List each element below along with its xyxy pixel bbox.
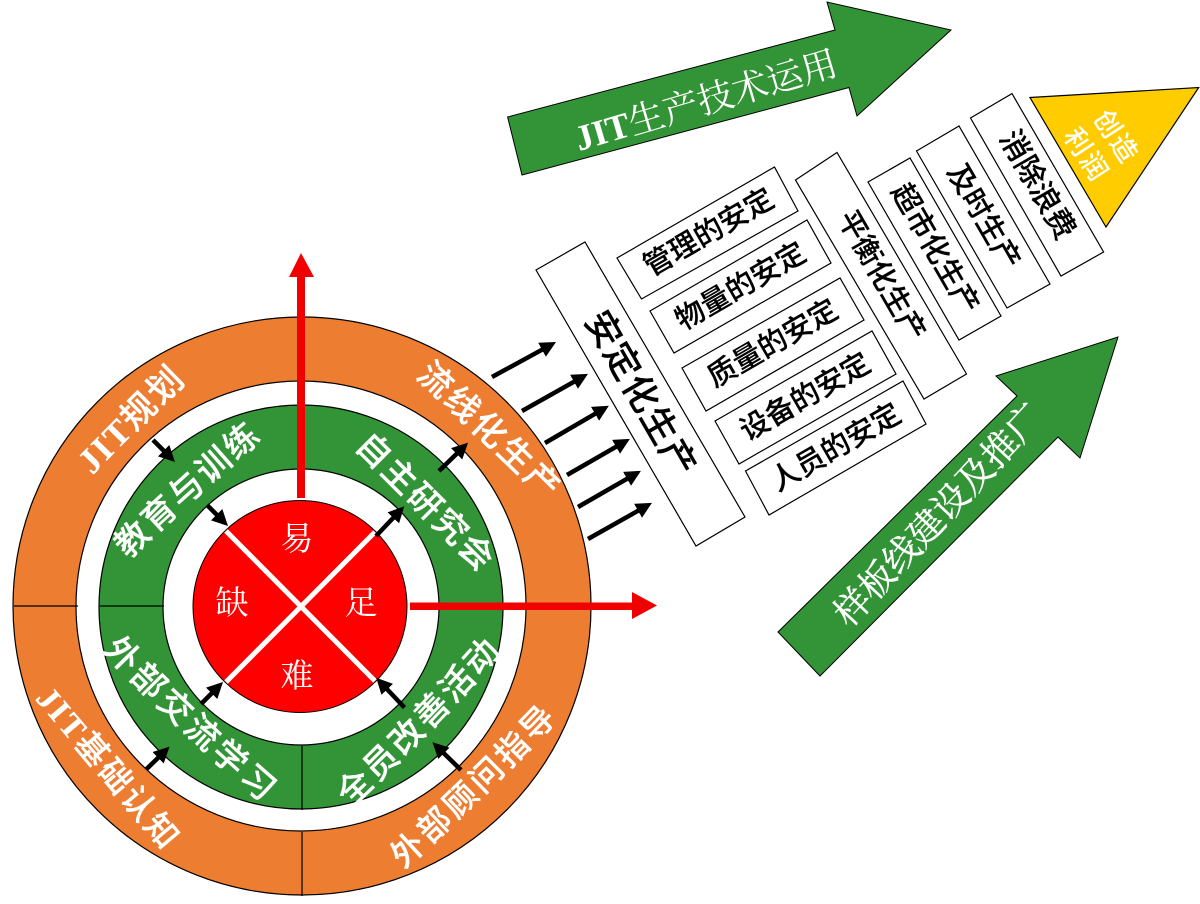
bottom green arrow: 样板线建设及推广 bbox=[778, 337, 1118, 676]
top green arrow: JIT生产技术运用: JIT生产技术运用 bbox=[570, 43, 842, 159]
box: 人员的安定: 人员的安定 bbox=[765, 397, 907, 498]
orange label: 流线化生产: 流线化生产 bbox=[416, 358, 562, 490]
arrow 3 bbox=[545, 412, 598, 443]
wheel connector arrows bbox=[147, 440, 461, 770]
box: 超市化生产: 超市化生产 bbox=[884, 178, 985, 320]
ring dividers bbox=[14, 606, 302, 896]
core label: 易: 易 bbox=[280, 522, 314, 558]
arrow: core to 自主研究会 bbox=[376, 515, 396, 536]
house: 安定化生产: 安定化生产 bbox=[577, 304, 704, 484]
green ring bbox=[99, 405, 503, 809]
arrow: JIT规划 to 教育与训练 bbox=[153, 440, 166, 454]
box: 及时生产 bbox=[916, 126, 1050, 308]
box: 消除浪费: 消除浪费 bbox=[993, 125, 1081, 245]
core label: 足: 足 bbox=[344, 586, 378, 622]
six arrows to stabilised production bbox=[492, 348, 642, 539]
bottom green arrow: 样板线建设及推广: 样板线建设及推广 bbox=[826, 396, 1052, 634]
box: 及时生产: 及时生产 bbox=[940, 158, 1027, 275]
box: 质量的安定 bbox=[682, 278, 864, 411]
arrow: 全员改善活动 to core bbox=[384, 686, 404, 708]
white cross bbox=[226, 531, 375, 682]
arrow: 教育与训练 to core bbox=[207, 505, 220, 518]
arrow 6 bbox=[588, 509, 642, 539]
yellow roof triangle: 创造利润 bbox=[1030, 88, 1199, 227]
arrow 1 bbox=[492, 348, 546, 377]
box: 设备的安定 bbox=[715, 331, 896, 464]
box: 消除浪费 bbox=[970, 94, 1104, 276]
red axis arrow right bbox=[410, 592, 657, 619]
green label: 教育与训练: 教育与训练 bbox=[112, 421, 261, 558]
green label: 全员改善活动: 全员改善活动 bbox=[340, 639, 498, 802]
box: 质量的安定: 质量的安定 bbox=[702, 293, 844, 394]
core disc bbox=[193, 500, 407, 712]
red axis arrow up bbox=[289, 253, 314, 498]
box: 管理的安定 bbox=[617, 167, 798, 299]
box: 平衡化生产 bbox=[796, 152, 966, 399]
arrow 2 bbox=[522, 380, 578, 411]
concentric wheel bbox=[12, 316, 592, 896]
white gap ring bbox=[76, 381, 526, 831]
top green arrow: JIT生产技术运用 bbox=[508, 2, 951, 175]
box: 物量的安定: 物量的安定 bbox=[670, 236, 812, 337]
outer orange ring bbox=[13, 317, 591, 895]
orange label: JIT规划: JIT规划 bbox=[80, 362, 185, 474]
inner white ring bbox=[163, 469, 439, 745]
green label: 自主研究会: 自主研究会 bbox=[355, 433, 492, 572]
arrow: 自主研究会 to 流线化生产 bbox=[439, 451, 460, 471]
orange label: JIT基础认知: JIT基础认知 bbox=[36, 688, 181, 850]
arrow 4 bbox=[567, 445, 620, 475]
red core circle bbox=[193, 500, 407, 712]
box: 超市化生产 bbox=[868, 158, 1001, 340]
arrow: JIT基础认知 to 外部交流学习 bbox=[147, 755, 161, 769]
yellow roof triangle: 创造利润: 利润 bbox=[1058, 123, 1114, 187]
orange label: 外部顾问指导: 外部顾问指导 bbox=[390, 704, 552, 869]
core label: 缺: 缺 bbox=[216, 585, 248, 622]
box: 管理的安定: 管理的安定 bbox=[638, 182, 780, 283]
box: 设备的安定: 设备的安定 bbox=[734, 347, 876, 448]
box: 物量的安定 bbox=[650, 220, 831, 353]
green label: 外部交流学习: 外部交流学习 bbox=[103, 636, 278, 800]
house: 安定化生产 bbox=[536, 242, 745, 546]
arrow: 外部顾问指导 to 全员改善活动 bbox=[441, 750, 461, 770]
arrow: 外部交流学习 to core bbox=[201, 690, 214, 704]
arrow 5 bbox=[578, 477, 630, 507]
box: 平衡化生产: 平衡化生产 bbox=[831, 205, 932, 347]
yellow roof triangle: 创造利润: 创造 bbox=[1088, 105, 1144, 169]
box: 人员的安定 bbox=[746, 381, 926, 515]
core label: 难: 难 bbox=[280, 658, 314, 695]
